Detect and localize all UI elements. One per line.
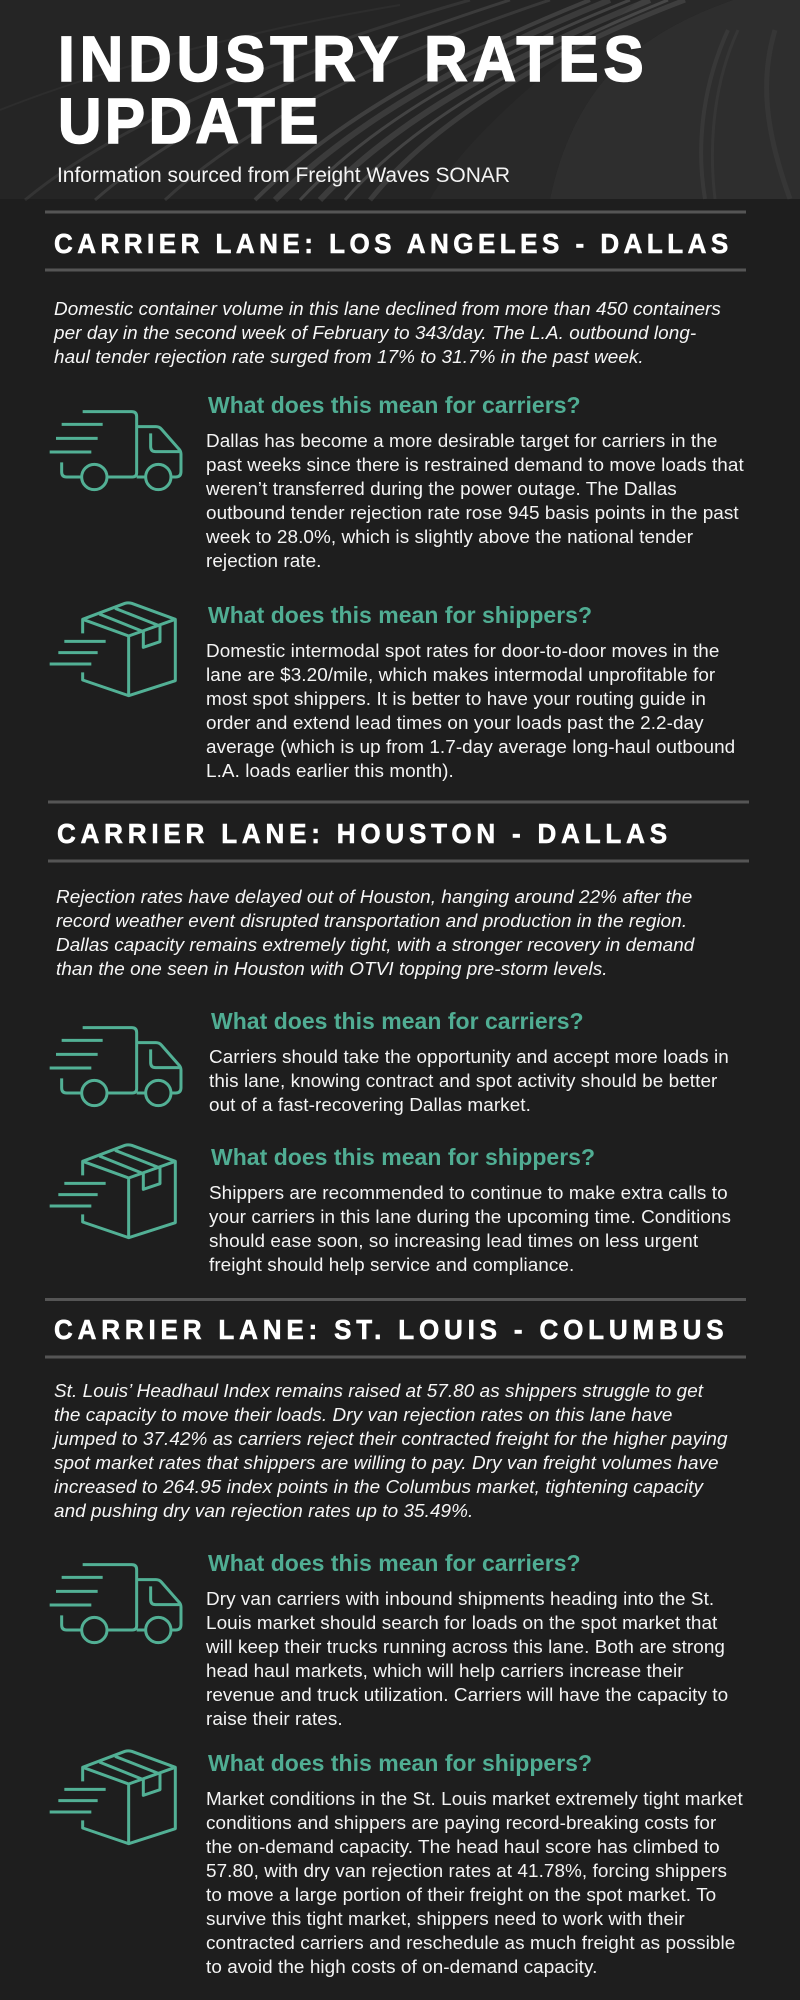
text: shippers: conditions and shippers are paying record-breaking costs for bbox=[206, 1813, 716, 1834]
title bbox=[58, 24, 644, 157]
text: carriers bbox=[205, 431, 744, 572]
heading: lane 3: CARRIER LANE: ST. LOUIS - COLUMBUS bbox=[54, 1314, 724, 1345]
text: shippers: order and extend lead times on your loads past the 2.2-day bbox=[206, 713, 704, 734]
text: shippers: to avoid the high costs of on-demand capacity. bbox=[206, 1957, 597, 1978]
text: shippers: contracted carriers and reschedule as much freight as possible bbox=[206, 1933, 735, 1954]
heading: carriers: What does this mean for carriers? bbox=[208, 1550, 581, 1576]
text: shippers bbox=[209, 1183, 731, 1276]
text: shippers: Domestic intermodal spot rates for door-to-door moves in the bbox=[206, 641, 719, 662]
text: shippers: L.A. loads earlier this month). bbox=[206, 761, 454, 782]
heading: lane 2: CARRIER LANE: HOUSTON - DALLAS bbox=[57, 818, 667, 849]
text: carriers bbox=[205, 1589, 728, 1730]
heading: lane 1: CARRIER LANE: LOS ANGELES - DALLAS bbox=[54, 228, 728, 259]
icon: box bbox=[50, 603, 175, 696]
intro text: lane 2 bbox=[56, 887, 695, 980]
text: carriers: outbound tender rejection rate rose 945 basis points in the past bbox=[206, 503, 739, 524]
text: shippers bbox=[206, 1789, 743, 1978]
intro text: lane 3: the capacity to move their loads. Dry van rejection rates on this lane have bbox=[54, 1405, 672, 1426]
intro text: lane 3: jumped to 37.42% as carriers reject their contracted freight for the higher paying bbox=[51, 1429, 728, 1450]
text: shippers: Shippers are recommended to continue to make extra calls to bbox=[209, 1183, 728, 1204]
heading: shippers: What does this mean for shippers? bbox=[208, 602, 592, 628]
text: shippers bbox=[206, 641, 735, 782]
text: carriers: raise their rates. bbox=[206, 1709, 343, 1730]
text: carriers: out of a fast-recovering Dallas market. bbox=[209, 1095, 531, 1116]
text: carriers: past weeks since there is restrained demand to move loads that bbox=[206, 455, 744, 476]
text: carriers: this lane, knowing contract and spot activity should be better bbox=[209, 1071, 717, 1092]
intro text: lane 1: Domestic container volume in this lane declined from more than 450 containers bbox=[54, 299, 721, 320]
icon: truck bbox=[50, 1565, 181, 1643]
text: shippers: to move a large portion of their freight on the spot market. To bbox=[206, 1885, 716, 1906]
intro text: lane 1: haul tender rejection rate surged from 17% to 31.7% in the past week. bbox=[54, 347, 644, 368]
text: carriers: Dry van carriers with inbound shipments heading into the St. bbox=[206, 1589, 714, 1610]
intro text: lane 3: and pushing dry van rejection rates up to 35.49%. bbox=[54, 1501, 473, 1522]
text: carriers: week to 28.0%, which is slightly above the national tender bbox=[205, 527, 693, 548]
subtitle: Information sourced from Freight Waves SONAR bbox=[57, 164, 510, 187]
heading: carriers: What does this mean for carriers? bbox=[211, 1008, 584, 1034]
text: carriers: revenue and truck utilization. Carriers will have the capacity to bbox=[206, 1685, 728, 1706]
heading: carriers: What does this mean for carriers? bbox=[208, 392, 581, 418]
intro text: lane 3: St. Louis’ Headhaul Index remains raised at 57.80 as shippers struggle to get bbox=[54, 1381, 704, 1402]
intro text: lane 2: Rejection rates have delayed out of Houston, hanging around 22% after the bbox=[56, 887, 692, 908]
icon: box bbox=[50, 1751, 175, 1844]
heading: shippers: What does this mean for shippers? bbox=[211, 1144, 595, 1170]
intro text: lane 3: increased to 264.95 index points in the Columbus market, tightening capacity bbox=[54, 1477, 705, 1498]
text: shippers: lane are $3.20/mile, which makes intermodal unprofitable for bbox=[206, 665, 715, 686]
intro text: lane 3: spot market rates that shippers are willing to pay. Dry van freight volumes have bbox=[54, 1453, 719, 1474]
text: carriers: Dallas has become a more desirable target for carriers in the bbox=[206, 431, 717, 452]
text: carriers: will keep their trucks running across this lane. Both are strong bbox=[205, 1637, 725, 1658]
heading: shippers: What does this mean for shippers? bbox=[208, 1750, 592, 1776]
intro text: lane 1: per day in the second week of February to 343/day. The L.A. outbound long- bbox=[53, 323, 696, 344]
text: shippers: average (which is up from 1.7-day average long-haul outbound bbox=[206, 737, 735, 758]
panel: Los Angeles - Dallas bbox=[45, 210, 746, 782]
text: carriers: Louis market should search for loads on the spot market that bbox=[206, 1613, 718, 1634]
intro text: lane 2: Dallas capacity remains extremely tight, with a stronger recovery in demand bbox=[56, 935, 695, 956]
panel: Houston - Dallas bbox=[48, 800, 749, 1276]
title: UPDATE bbox=[58, 86, 318, 157]
text: shippers: the on-demand capacity. The head haul score has climbed to bbox=[206, 1837, 720, 1858]
text: carriers: rejection rate. bbox=[206, 551, 322, 572]
header banner with highway photo bbox=[0, 0, 800, 200]
text: carriers: Carriers should take the opportunity and accept more loads in bbox=[209, 1047, 729, 1068]
text: shippers: should ease soon, so increasing lead times on less urgent bbox=[209, 1231, 699, 1252]
text: shippers: most spot shippers. It is better to have your routing guide in bbox=[206, 689, 706, 710]
text: shippers: 57.80, with dry van rejection rates at 41.78%, forcing shippers bbox=[206, 1861, 727, 1882]
intro text: lane 2: than the one seen in Houston with OTVI topping pre-storm levels. bbox=[56, 959, 608, 980]
title: INDUSTRY RATES bbox=[58, 24, 644, 95]
intro text: lane 3 bbox=[51, 1381, 728, 1522]
intro text: lane 1 bbox=[53, 299, 721, 368]
text: shippers: Market conditions in the St. Louis market extremely tight market bbox=[206, 1789, 743, 1810]
text: shippers: survive this tight market, shippers need to work with their bbox=[206, 1909, 685, 1930]
text: carriers bbox=[209, 1047, 729, 1116]
panel: St. Louis - Columbus bbox=[45, 1298, 746, 1978]
text: shippers: freight should help service and compliance. bbox=[209, 1255, 574, 1276]
text: shippers: your carriers in this lane during the upcoming time. Conditions bbox=[209, 1207, 731, 1228]
icon: truck bbox=[50, 1028, 181, 1106]
intro text: lane 2: record weather event disrupted transportation and production in the region. bbox=[56, 911, 687, 932]
text: carriers: head haul markets, which will help carriers increase their bbox=[206, 1661, 684, 1682]
icon: truck bbox=[50, 412, 181, 490]
text: carriers: weren’t transferred during the power outage. The Dallas bbox=[205, 479, 677, 500]
icon: box bbox=[50, 1145, 175, 1238]
